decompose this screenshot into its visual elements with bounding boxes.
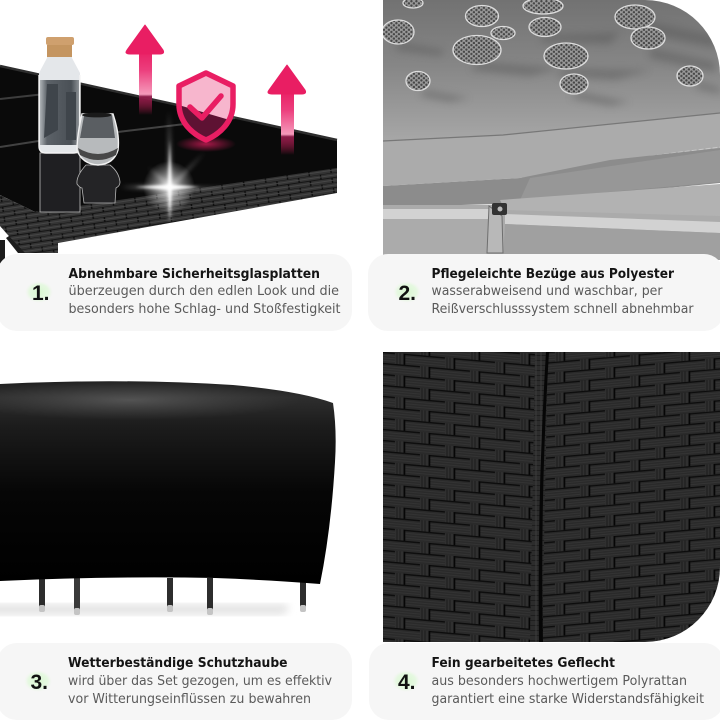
photo: table with safety glass top xyxy=(0,25,337,268)
photo: weatherproof cover xyxy=(0,380,336,615)
number 3: 3. xyxy=(30,671,48,694)
number 3 xyxy=(24,670,52,694)
rattan rim xyxy=(0,168,337,253)
icon: upward arrow right xyxy=(268,65,306,155)
card 4 xyxy=(369,643,720,720)
cover highlight xyxy=(8,384,252,416)
card 1 text xyxy=(68,266,341,317)
card 3 text xyxy=(68,655,332,707)
drop shadows xyxy=(395,20,720,106)
number 2 xyxy=(393,281,421,305)
zipper strip xyxy=(383,209,720,233)
card 3 text: Wetterbeständige Schutzhaube xyxy=(68,655,288,671)
card 4 text xyxy=(432,655,705,707)
icon: shield with check xyxy=(175,70,240,152)
cushion upper flap xyxy=(383,113,720,186)
corner seam xyxy=(530,352,548,642)
icon: sparkle highlight xyxy=(120,110,232,224)
number 1 xyxy=(25,281,53,305)
weave left xyxy=(383,352,543,642)
photo: water-repellent polyester cover xyxy=(382,0,720,260)
card 1 text: überzeugen durch den edlen Look und die xyxy=(68,283,339,299)
card 1 text: besonders hohe Schlag- und Stoßfestigkeit xyxy=(68,301,341,317)
icon: drinking glass xyxy=(77,113,120,203)
cushion shadowed fold xyxy=(383,148,720,207)
icon: upward arrow left xyxy=(126,25,164,115)
legs xyxy=(39,578,306,615)
cover body xyxy=(0,381,336,584)
card 4 text: aus besonders hochwertigem Polyrattan xyxy=(432,673,687,689)
card 1 xyxy=(0,254,352,331)
number 4: 4. xyxy=(398,671,416,694)
floor shadow xyxy=(0,604,289,615)
card 2 text: Reißverschlusssystem schnell abnehmbar xyxy=(432,301,694,317)
weave right xyxy=(543,352,720,642)
card 2 text: Pflegeleichte Bezüge aus Polyester xyxy=(432,266,674,282)
card 2 xyxy=(368,254,720,331)
card 2 text: wasserabweisend und waschbar, per xyxy=(432,283,663,299)
number 4 xyxy=(392,670,420,694)
card 2 text xyxy=(432,266,694,317)
card 3 text: wird über das Set gezogen, um es effektiv xyxy=(68,673,332,689)
photo: polyrattan weave xyxy=(383,352,720,642)
zipper pull xyxy=(487,203,507,253)
table legs xyxy=(0,234,28,268)
card 3 text: vor Witterungseinflüssen zu bewahren xyxy=(68,691,311,707)
water drops xyxy=(382,0,703,94)
card 1 text: Abnehmbare Sicherheitsglasplatten xyxy=(68,266,320,282)
icon: water bottle with cork xyxy=(39,37,80,212)
glass shelf lines xyxy=(0,94,45,99)
number 2: 2. xyxy=(398,282,416,305)
lower panel xyxy=(383,205,720,260)
fabric surface xyxy=(383,0,720,145)
number 1: 1. xyxy=(32,282,50,305)
card 3 xyxy=(0,643,352,720)
card 4 text: Fein gearbeitetes Geflecht xyxy=(432,655,615,671)
glass top xyxy=(0,66,337,212)
